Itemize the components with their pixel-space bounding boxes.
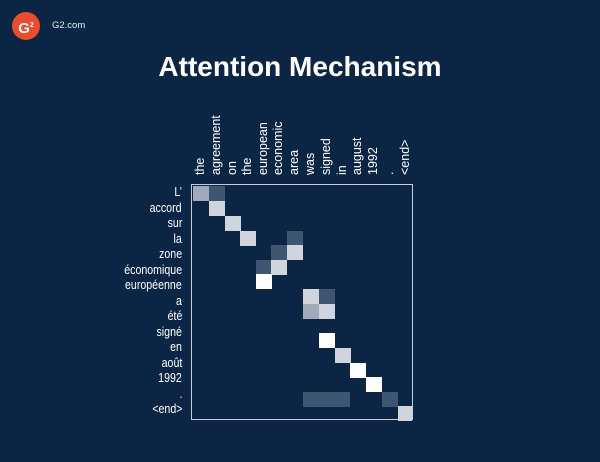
column labels: the	[240, 158, 254, 175]
column labels: area	[287, 150, 301, 175]
row labels: économique	[124, 263, 182, 277]
column labels: was	[303, 153, 317, 175]
row labels: zone	[159, 247, 182, 261]
row labels: <end>	[152, 402, 182, 416]
row labels: signé	[157, 325, 182, 339]
row labels: accord	[150, 201, 182, 215]
column labels: .	[382, 172, 396, 175]
column labels: on	[225, 161, 239, 175]
row labels	[124, 185, 182, 416]
row labels: en	[170, 340, 182, 354]
column labels	[193, 115, 412, 175]
title: Attention Mechanism	[158, 51, 442, 82]
row labels: européenne	[125, 278, 182, 292]
column labels: in	[335, 165, 349, 175]
row labels: été	[167, 309, 182, 323]
column labels: the	[193, 158, 207, 175]
attention matrix	[191, 184, 413, 420]
logo	[12, 12, 40, 40]
column labels: august	[350, 137, 364, 175]
logo: G2	[18, 20, 34, 37]
column labels: european	[256, 122, 270, 175]
row labels: .	[179, 387, 182, 401]
column labels: <end>	[398, 140, 412, 175]
column labels: economic	[271, 122, 285, 175]
row labels: L’	[174, 185, 182, 199]
row labels: août	[161, 356, 182, 370]
site label: G2.com	[52, 20, 85, 31]
row labels: 1992	[158, 371, 182, 385]
row labels: la	[174, 232, 182, 246]
row labels: a	[176, 294, 182, 308]
column labels: signed	[319, 138, 333, 175]
column labels: 1992	[366, 147, 380, 175]
row labels: sur	[167, 216, 182, 230]
column labels: agreement	[209, 115, 223, 175]
